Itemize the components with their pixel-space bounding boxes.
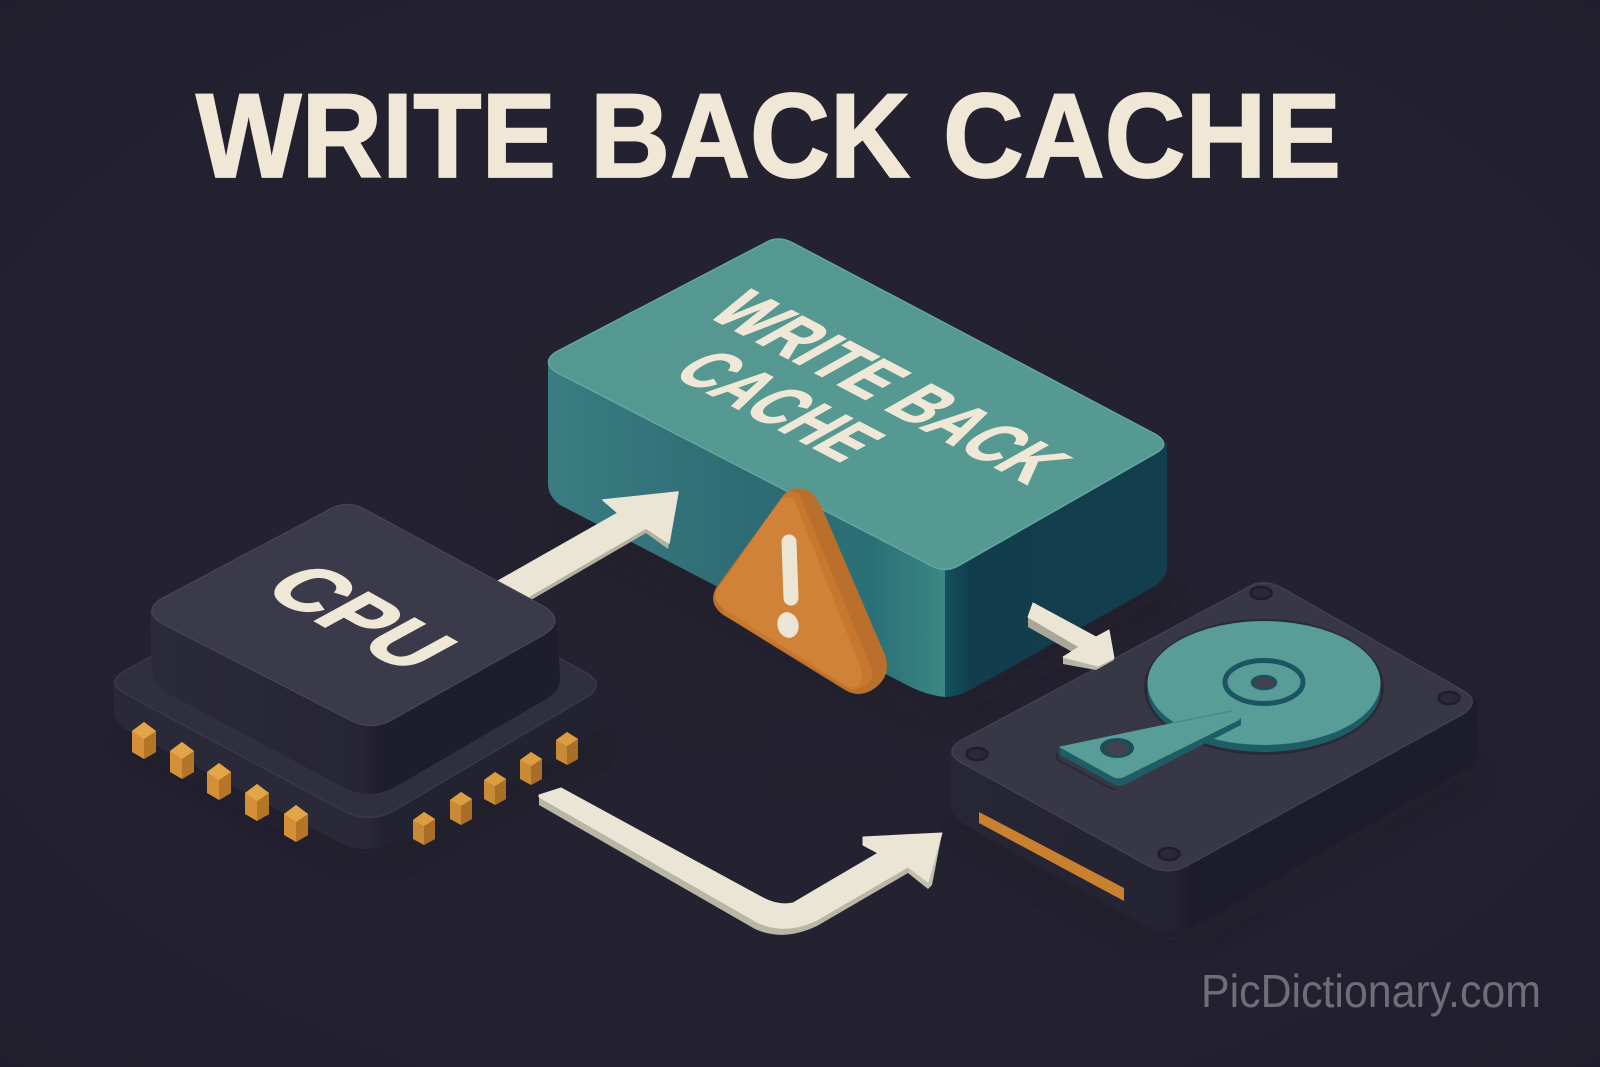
drive screws: [966, 587, 1460, 860]
title: [196, 69, 1341, 203]
CPU block top: [152, 504, 555, 726]
cache right face: [945, 443, 1167, 697]
chip base side: [113, 680, 598, 849]
panel: CPU chip: [113, 504, 600, 860]
CPU label: CPU: [244, 552, 477, 682]
title: BACK: [590, 69, 910, 203]
drive slot: [979, 812, 1124, 901]
cache label: WRITE BACK: [690, 282, 1087, 493]
drive top: [952, 583, 1472, 871]
exclamation mark: [774, 542, 802, 640]
drive side: [949, 700, 1478, 932]
triangle bevel: [722, 491, 872, 690]
title: WRITE: [196, 69, 556, 203]
chip base top: [115, 545, 596, 818]
arrow: CPU to disk: [539, 788, 942, 935]
panel: write back cache block: [548, 239, 1170, 717]
panel: hard disk drive: [949, 583, 1480, 942]
triangle face: [715, 497, 862, 687]
arrow: CPU to cache: [470, 492, 678, 620]
cache top face: [548, 239, 1164, 570]
title: CACHE: [943, 69, 1341, 203]
warning triangle: [713, 488, 887, 694]
CPU block side: [150, 610, 560, 794]
disk platter: [1144, 619, 1384, 755]
chip pins: [132, 722, 578, 845]
cache label: CACHE: [655, 341, 901, 471]
watermark: PicDictionary.com: [1201, 965, 1541, 1017]
read/write arm: [1056, 710, 1241, 790]
cache left face: [548, 362, 945, 697]
arrow: cache to disk: [1028, 603, 1114, 670]
triangle body: [713, 488, 887, 694]
